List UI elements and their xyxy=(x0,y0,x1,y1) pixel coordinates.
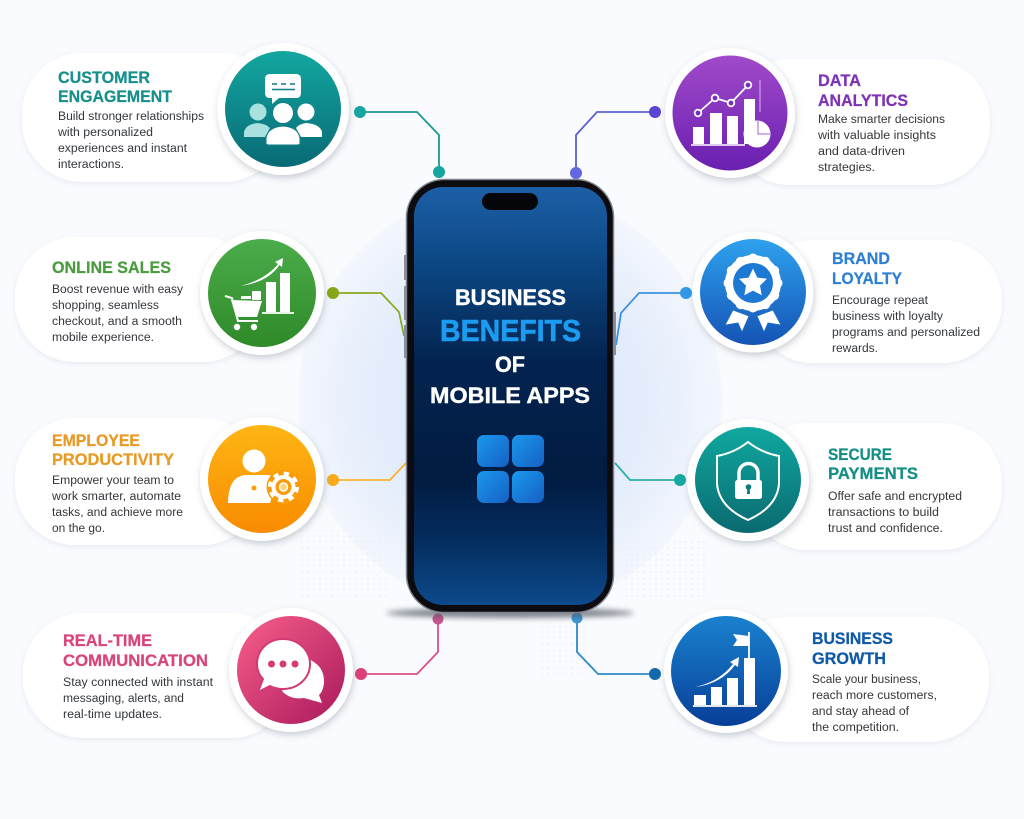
connector: online sales xyxy=(327,287,404,336)
heading: online sales: ONLINE SALES xyxy=(52,259,171,277)
background glow behind phone xyxy=(298,188,722,675)
heading: secure payments: PAYMENTS xyxy=(828,465,918,483)
heading: data analytics: DATA xyxy=(818,72,861,90)
icon: app grid xyxy=(477,435,544,503)
panel: real-time communication xyxy=(23,608,353,738)
heading: real-time communication: REAL-TIME xyxy=(63,632,152,650)
heading: business growth: GROWTH xyxy=(812,650,886,668)
connector: customer engagement xyxy=(354,106,445,178)
panel: brand loyalty xyxy=(692,232,1002,363)
phone notch xyxy=(482,193,538,210)
text: data analytics description: and data-driven xyxy=(818,146,905,158)
text: real-time communication description: Stay connected with instant xyxy=(63,677,214,689)
heading: employee productivity: EMPLOYEE xyxy=(52,432,140,450)
icon: shopping cart with rising bars xyxy=(200,231,324,355)
heading: data analytics: ANALYTICS xyxy=(818,92,908,110)
icon: employee with gear xyxy=(200,417,324,541)
text: business growth description: reach more customers, xyxy=(812,690,937,702)
icon: analytics bar chart xyxy=(665,48,795,178)
heading: real-time communication: COMMUNICATION xyxy=(63,652,208,670)
phone side buttons xyxy=(404,255,616,358)
title: BENEFITS xyxy=(440,313,581,348)
text: online sales description: mobile experience. xyxy=(52,332,154,344)
connector: data analytics xyxy=(570,106,661,179)
heading: brand loyalty: LOYALTY xyxy=(832,270,902,288)
heading: secure payments: SECURE xyxy=(828,446,892,464)
connector: business growth xyxy=(572,612,661,680)
text: data analytics description: strategies. xyxy=(818,162,875,174)
title xyxy=(430,285,590,408)
icon: growth chart with flag xyxy=(664,609,788,733)
title: MOBILE APPS xyxy=(430,383,590,408)
text: real-time communication description: real-time updates. xyxy=(63,709,162,721)
icon: customer engagement people with speech bubble xyxy=(217,43,349,175)
text: business growth description: the competition. xyxy=(812,722,899,734)
heading: brand loyalty: BRAND xyxy=(832,250,890,268)
text: business growth description: and stay ahead of xyxy=(812,706,910,718)
panel: customer engagement xyxy=(22,43,349,182)
text: data analytics description: Make smarter decisions xyxy=(818,114,945,126)
icon: chat bubbles xyxy=(229,608,353,732)
connector: real-time communication xyxy=(355,614,444,680)
text: brand loyalty description: Encourage repeat xyxy=(832,295,929,307)
text: customer engagement description: Build stronger relationships xyxy=(58,111,204,123)
text: customer engagement description: with personalized xyxy=(57,127,153,139)
icon: shield with padlock xyxy=(687,419,809,541)
panel: employee productivity xyxy=(15,417,324,545)
panel: online sales xyxy=(15,231,324,362)
text: employee productivity description: work smarter, automate xyxy=(51,491,181,503)
heading: employee productivity: PRODUCTIVITY xyxy=(52,451,174,469)
text: brand loyalty description: business with loyalty xyxy=(832,311,943,323)
heading: business growth: BUSINESS xyxy=(812,630,893,648)
title: OF xyxy=(495,352,525,377)
text: real-time communication description: messaging, alerts, and xyxy=(63,693,184,705)
panel: business growth xyxy=(664,609,989,742)
text: brand loyalty description: rewards. xyxy=(832,343,878,355)
panel: data analytics xyxy=(665,48,990,185)
text: customer engagement description: experiences and instant xyxy=(58,143,188,155)
text: secure payments description: Offer safe and encrypted xyxy=(828,491,962,503)
text: secure payments description: trust and confidence. xyxy=(828,523,943,535)
phone xyxy=(404,180,616,612)
panel: secure payments xyxy=(687,419,1002,550)
text: employee productivity description: Empower your team to xyxy=(52,475,174,487)
text: online sales description: shopping, seamless xyxy=(52,300,159,312)
text: customer engagement description: interactions. xyxy=(58,159,124,171)
text: employee productivity description: tasks, and achieve more xyxy=(52,507,183,519)
text: employee productivity description: on the go. xyxy=(52,523,105,535)
connector: brand loyalty xyxy=(616,287,692,345)
text: data analytics description: with valuable insights xyxy=(817,130,936,142)
heading: customer engagement: CUSTOMER xyxy=(58,69,150,87)
text: online sales description: Boost revenue with easy xyxy=(52,284,183,296)
title: BUSINESS xyxy=(455,285,566,310)
connector: secure payments xyxy=(615,463,686,486)
text: brand loyalty description: programs and personalized xyxy=(832,327,980,339)
text: online sales description: checkout, and a smooth xyxy=(52,316,182,328)
heading: customer engagement: ENGAGEMENT xyxy=(58,88,172,106)
text: business growth description: Scale your business, xyxy=(812,674,921,686)
text: secure payments description: transactions to build xyxy=(828,507,939,519)
connector: employee productivity xyxy=(327,463,406,486)
icon: award badge with star xyxy=(692,232,814,352)
phone screen xyxy=(414,187,607,605)
phone shadow xyxy=(386,608,634,618)
